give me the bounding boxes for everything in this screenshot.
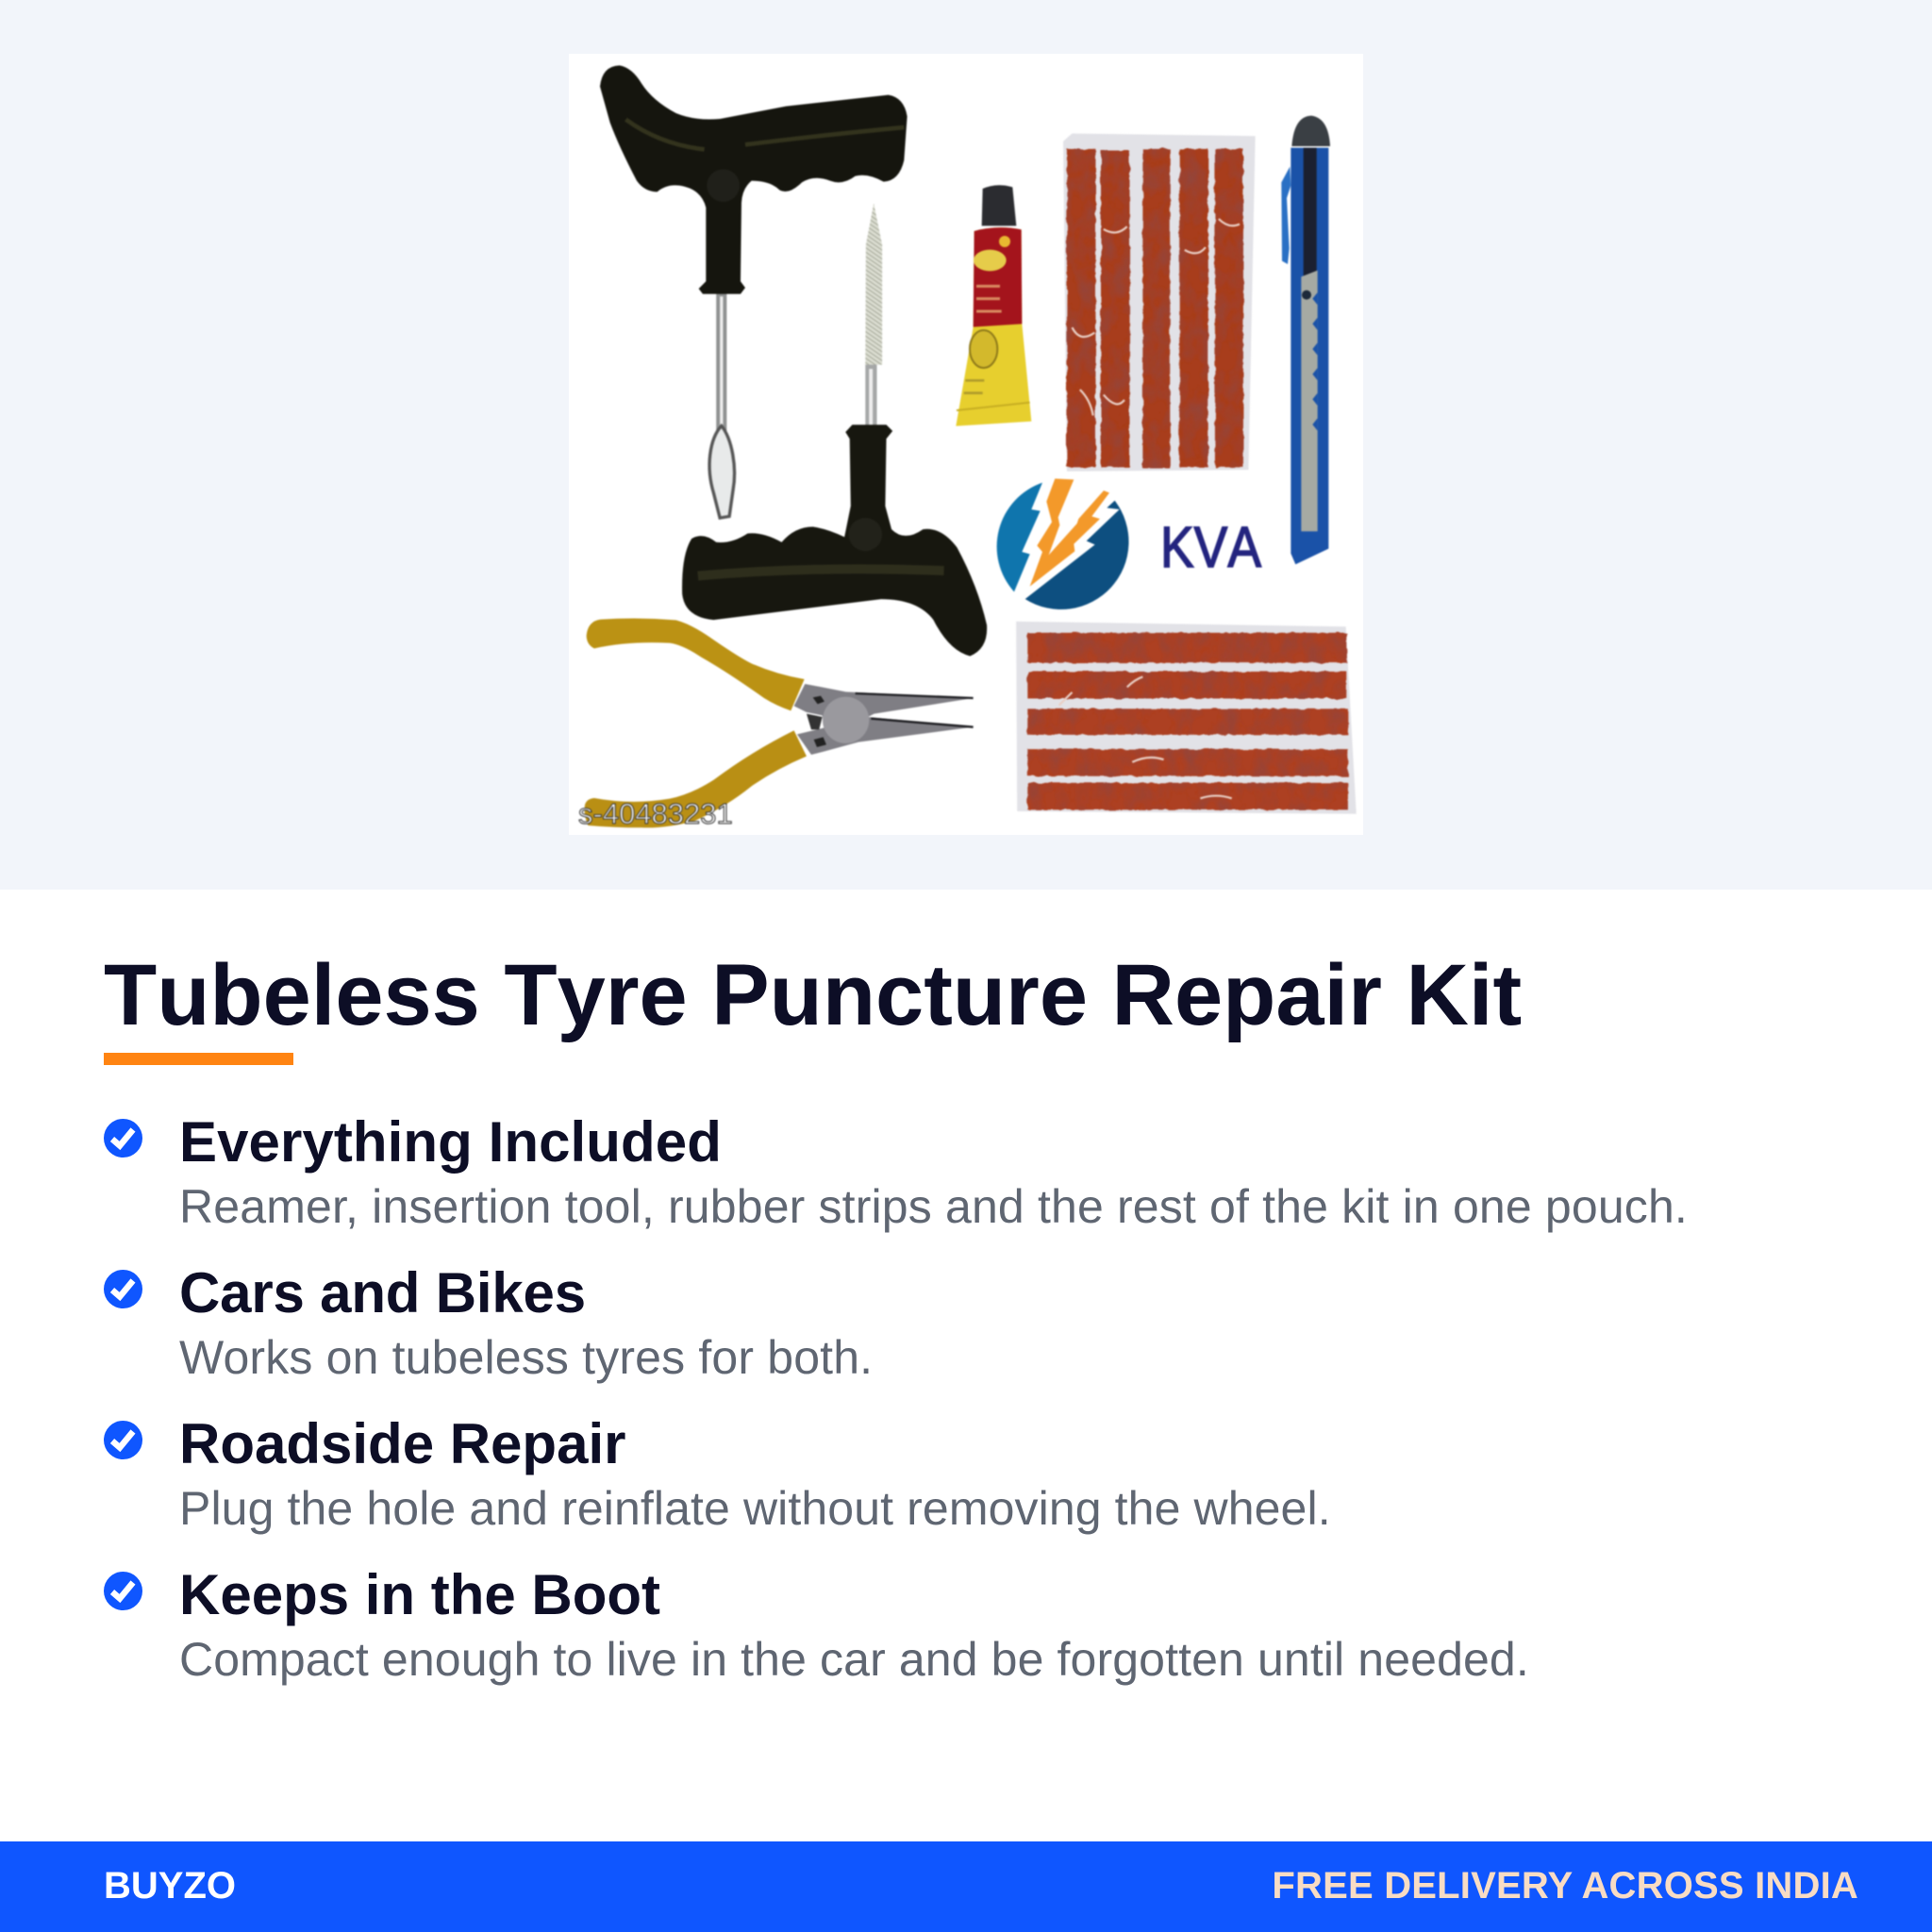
icon: utility knife [1281, 116, 1330, 564]
feature: Cars and Bikes [104, 1261, 873, 1384]
feature: Everything Included [104, 1110, 1688, 1233]
logo wordmark: KVA [1160, 515, 1261, 579]
product illustration: repair kit contents [569, 54, 1363, 835]
feature heading: Roadside Repair [179, 1412, 625, 1475]
icon: vertical rubber strips pack [1063, 133, 1256, 472]
footer bar [0, 1841, 1932, 1932]
brand name: BUYZO [104, 1865, 236, 1907]
icon: glue tube [956, 185, 1031, 426]
feature heading: Everything Included [179, 1110, 722, 1174]
icon: check badge [104, 1270, 142, 1308]
icon: check badge [104, 1421, 142, 1459]
icon: pliers [585, 618, 974, 827]
icon: check badge [104, 1572, 142, 1610]
icon: upper T-handle reamer [600, 65, 908, 518]
delivery note: FREE DELIVERY ACROSS INDIA [1272, 1865, 1858, 1907]
feature heading: Cars and Bikes [179, 1261, 586, 1324]
product code watermark: s-40483231 [578, 797, 733, 830]
feature: Keeps in the Boot [104, 1563, 1529, 1686]
title accent underline [104, 1053, 293, 1065]
icon: KVA logo [997, 478, 1129, 609]
icon: check badge [104, 1119, 142, 1158]
hero panel: product photo background [0, 0, 1932, 890]
feature heading: Keeps in the Boot [179, 1563, 660, 1626]
icon: lower T-handle insertion needle [682, 204, 987, 656]
feature description: Works on tubeless tyres for both. [179, 1331, 873, 1384]
feature description: Plug the hole and reinflate without removing the wheel. [179, 1482, 1331, 1535]
feature description: Reamer, insertion tool, rubber strips and the rest of the kit in one pouch. [179, 1180, 1688, 1233]
feature description: Compact enough to live in the car and be forgotten until needed. [179, 1633, 1529, 1686]
feature: Roadside Repair [104, 1412, 1331, 1535]
icon: horizontal rubber strips pack [1016, 622, 1357, 814]
title: Tubeless Tyre Puncture Repair Kit [104, 947, 1522, 1043]
